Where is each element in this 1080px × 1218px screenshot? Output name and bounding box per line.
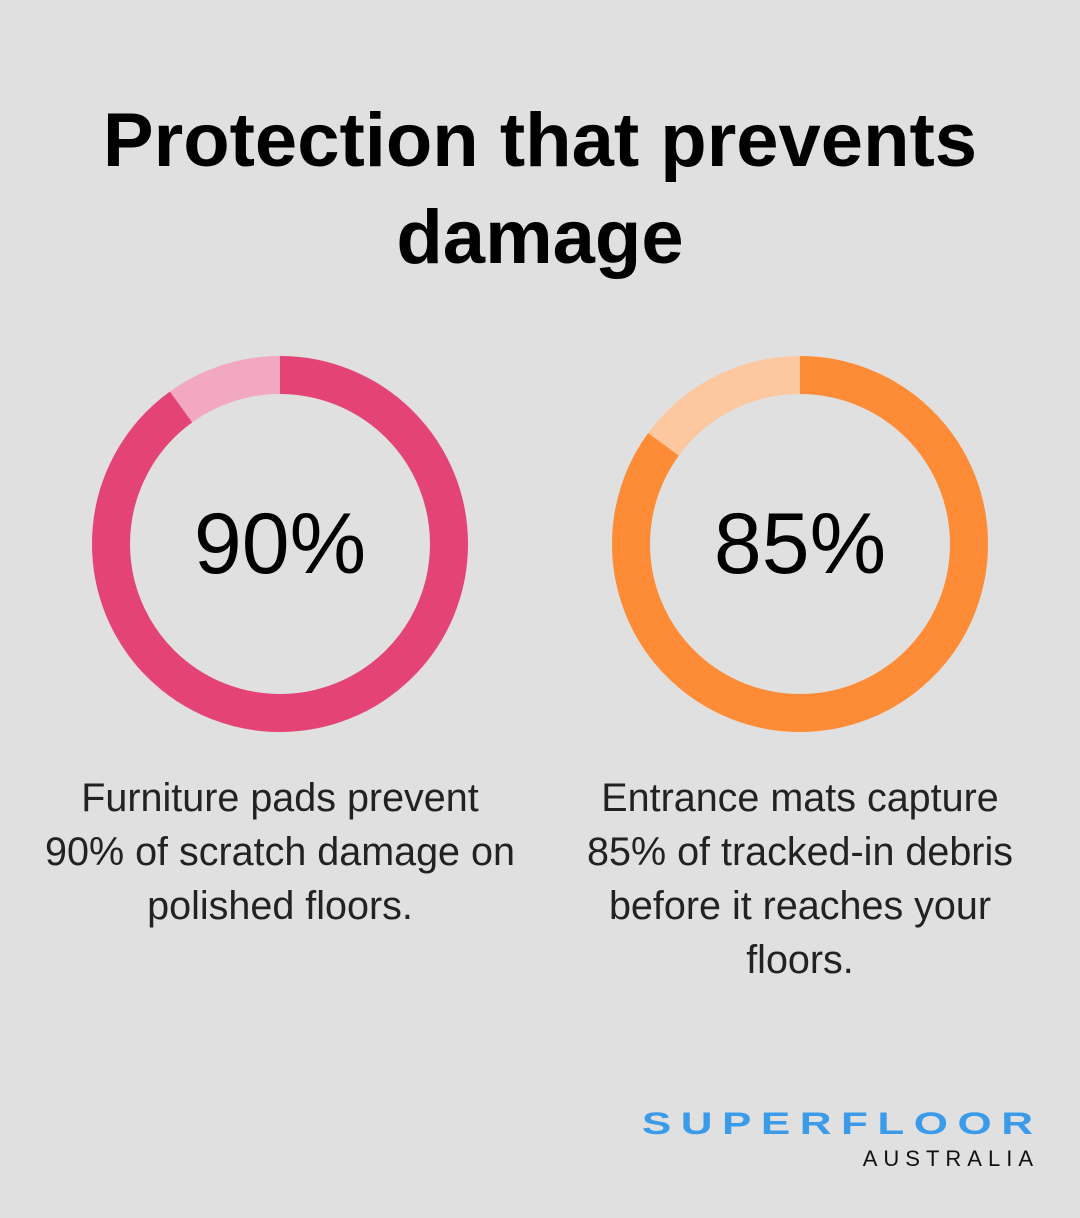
text: entrance mats	[587, 776, 1013, 982]
donut: entrance mats 85%: 85%	[714, 496, 886, 592]
text: furniture pads: Furniture pads prevent	[81, 776, 479, 820]
text: entrance mats: 85% of tracked-in debris	[587, 830, 1013, 874]
logo: SUPERFLOOR	[642, 1106, 1042, 1141]
text: entrance mats: Entrance mats capture	[601, 776, 999, 820]
text: entrance mats: before it reaches your	[609, 884, 991, 928]
donut: entrance mats 85%	[612, 356, 988, 732]
text: furniture pads	[45, 776, 515, 928]
text: furniture pads: 90% of scratch damage on	[45, 830, 515, 874]
text: furniture pads: polished floors.	[147, 884, 413, 928]
donut: furniture pads 90%	[92, 356, 468, 732]
title: damage	[396, 195, 684, 280]
logo: AUSTRALIA	[863, 1146, 1039, 1171]
text: entrance mats: floors.	[746, 938, 854, 982]
logo	[642, 1106, 1042, 1171]
title	[103, 98, 977, 280]
title: Protection that prevents	[103, 98, 977, 183]
donut: furniture pads 90%: 90%	[194, 496, 366, 592]
